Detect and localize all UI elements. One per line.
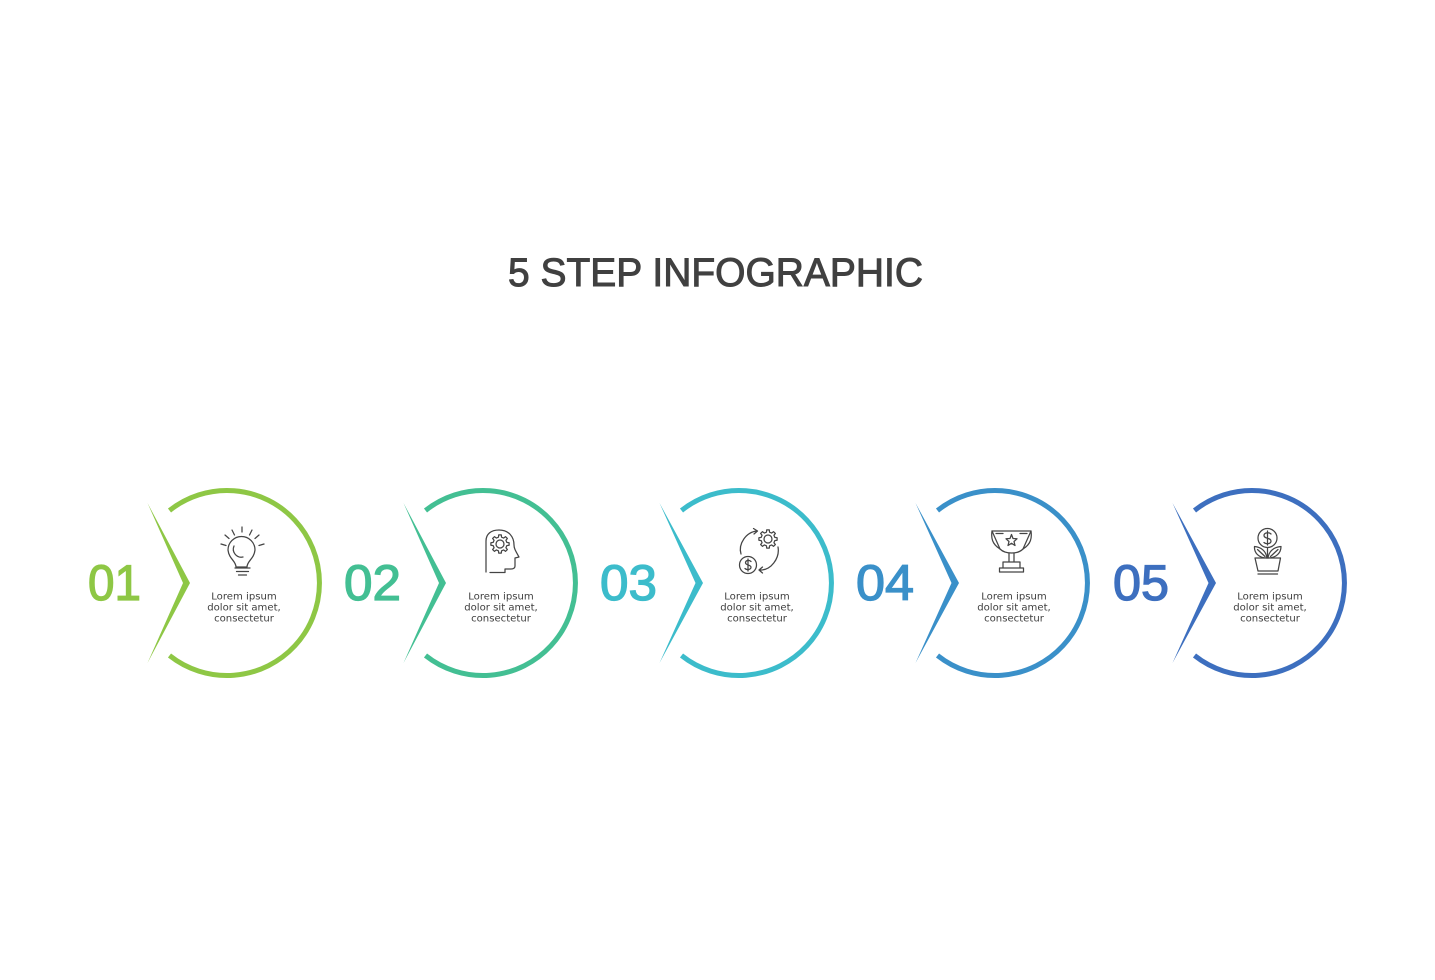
step 2 ring <box>426 490 575 676</box>
icon: head with gear <box>486 530 519 572</box>
icon: money plant <box>1254 528 1281 574</box>
icon: light bulb <box>221 527 264 575</box>
step 5 text: Lorem ipsum <box>1237 592 1303 602</box>
icon: trophy <box>992 531 1031 572</box>
step 1 text: consectetur <box>214 614 275 624</box>
step 4 number: 04 <box>856 555 914 611</box>
step 5 chevron <box>1172 503 1216 663</box>
step 2 <box>344 490 575 676</box>
title: 5 STEP INFOGRAPHIC <box>508 251 923 295</box>
step 1 number: 01 <box>88 555 141 611</box>
icon: money and gear cycle <box>740 528 778 574</box>
step 1 text: dolor sit amet, <box>207 602 281 614</box>
step 4 ring <box>938 490 1087 676</box>
step 3 ring <box>682 490 831 676</box>
step 5 number: 05 <box>1113 555 1169 611</box>
step 4 text: Lorem ipsum <box>981 592 1047 602</box>
step 3 text: Lorem ipsum <box>724 592 790 602</box>
step 1 <box>88 490 319 676</box>
step 5 text: dolor sit amet, <box>1233 602 1307 614</box>
step 3 chevron <box>660 503 703 663</box>
step 5 <box>1113 490 1344 676</box>
step 1 text: Lorem ipsum <box>211 592 277 602</box>
step 2 text: Lorem ipsum <box>468 592 534 602</box>
step 2 text: consectetur <box>471 614 532 624</box>
step 4 text: consectetur <box>984 614 1045 624</box>
step 1 chevron <box>148 503 190 663</box>
step 3 number: 03 <box>600 555 657 611</box>
step 4 <box>856 490 1087 676</box>
step 4 text: dolor sit amet, <box>977 602 1051 614</box>
step 5 text: consectetur <box>1240 614 1301 624</box>
step 2 text: dolor sit amet, <box>464 602 538 614</box>
step 2 chevron <box>404 503 446 663</box>
step 3 text: consectetur <box>727 614 788 624</box>
step 4 chevron <box>916 503 959 663</box>
step 5 ring <box>1194 490 1344 676</box>
step 3 <box>600 490 831 676</box>
step 1 ring <box>170 490 319 676</box>
step 2 number: 02 <box>344 555 401 611</box>
step 3 text: dolor sit amet, <box>720 602 794 614</box>
